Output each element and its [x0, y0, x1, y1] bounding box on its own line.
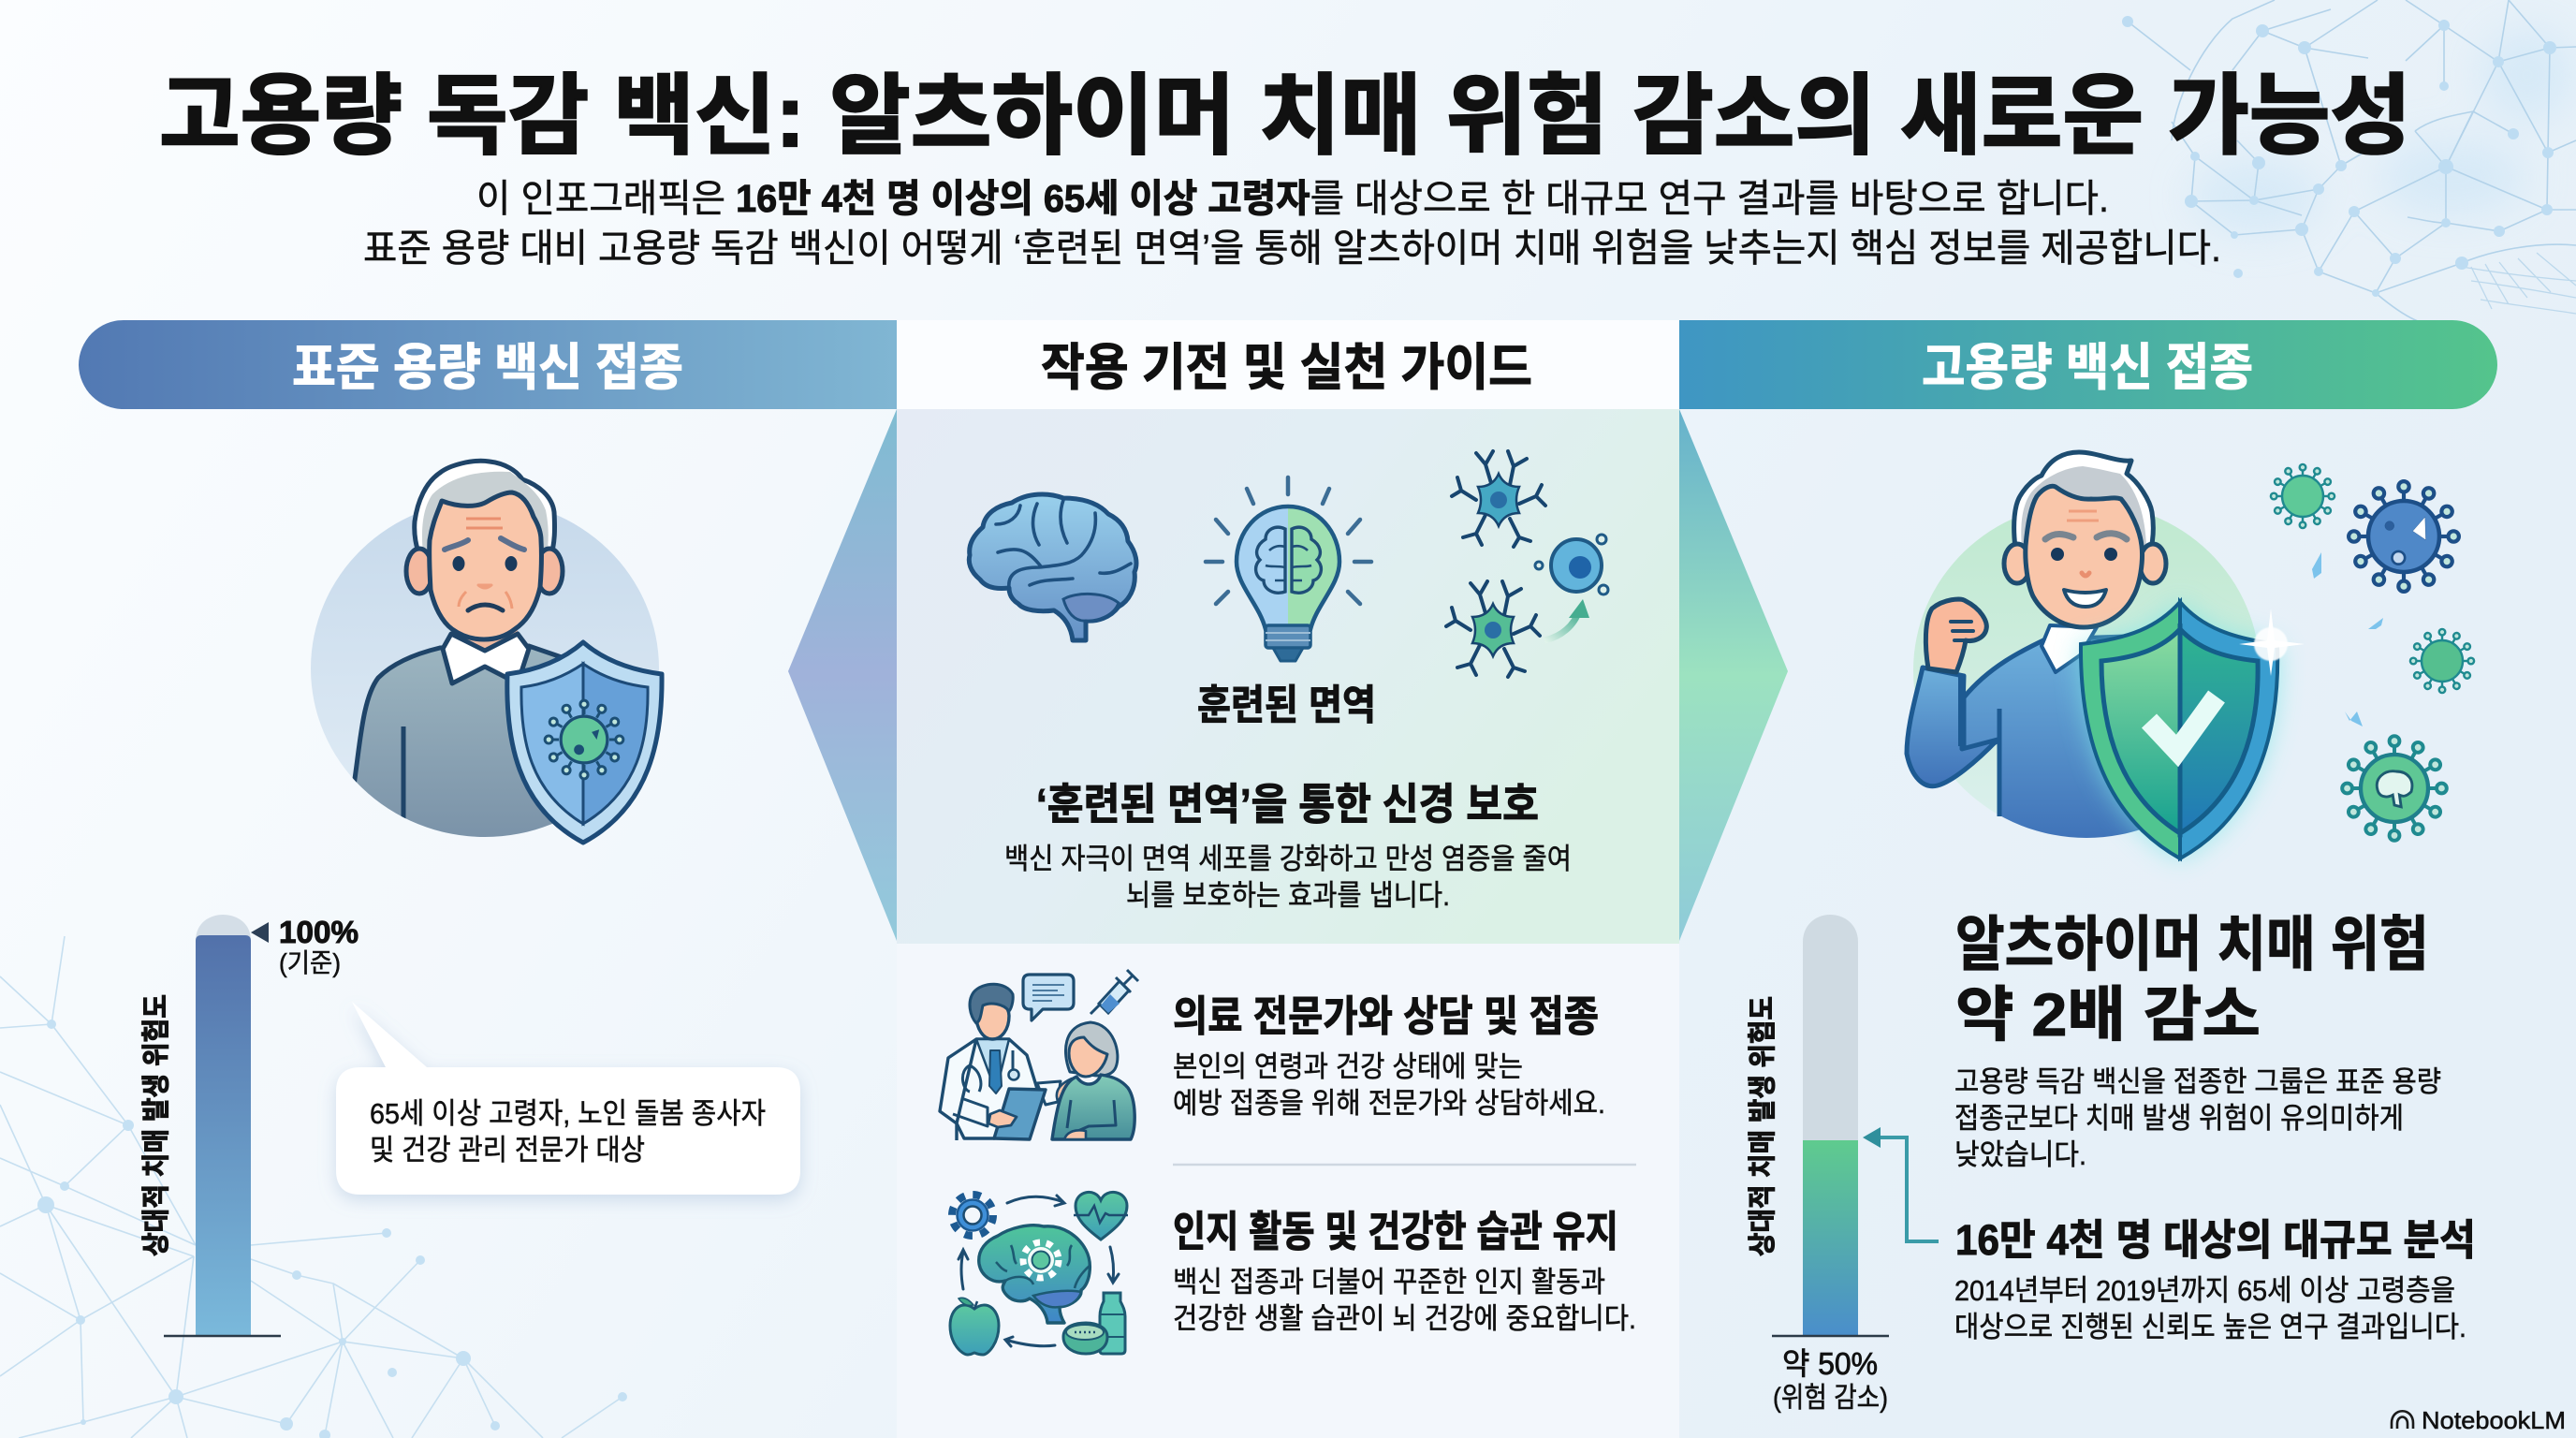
icon: brain: [969, 494, 1136, 640]
icon: virus with brain: [2342, 736, 2447, 841]
value: about 50 percent: 약 50%: [1782, 1346, 1878, 1381]
icon: bowl: [1063, 1323, 1107, 1354]
marker: 100 percent: [251, 922, 269, 943]
icon: brain with gear: [979, 1225, 1090, 1323]
intro text: [363, 177, 2221, 270]
heading: key result: 약 2배 감소: [1955, 981, 2261, 1049]
icon: apple: [950, 1298, 999, 1355]
panel: center guide: [897, 944, 1679, 1438]
heading: neural protection: ‘훈련된 면역’을 통한 신경 보호: [1036, 780, 1539, 829]
heading: study size: 16만 4천 명 대상의 대규모 분석: [1955, 1216, 2476, 1264]
value: 100 percent: 100%: [279, 915, 359, 949]
doctor: [940, 984, 1061, 1140]
header: standard dose: 표준 용량 백신 접종: [292, 340, 683, 396]
axis label: 상대적 치매 발생 위험도: [1748, 996, 1778, 1256]
icon: green virus: [2271, 464, 2334, 528]
text: study description: [1954, 1274, 2466, 1343]
icon: heart: [1074, 1192, 1128, 1240]
title: 고용량 독감 백신: 알츠하이머 치매 위험 감소의 새로운 가능성: [159, 66, 2411, 165]
text: study description: 2014년부터 2019년까지 65세 이상 고령층을: [1954, 1274, 2455, 1307]
header: mechanism and guide: [897, 320, 1679, 409]
text: neural protection description: 백신 자극이 면역 세포를 강화하고 만성 염증을 줄여: [1004, 843, 1572, 875]
icon: glowing shield with check: [2081, 602, 2305, 858]
illustration: brain, bulb and neurons: [969, 451, 1608, 677]
patient: [1052, 1022, 1134, 1139]
panel: center mechanism: [897, 409, 1679, 944]
callout: target group: [336, 1002, 800, 1195]
icon: bottle: [1100, 1293, 1125, 1354]
text: study description: 대상으로 진행된 신뢰도 높은 연구 결과입니다.: [1954, 1311, 2466, 1343]
text: habits description: [1173, 1266, 1636, 1335]
text: key result description: [1954, 1065, 2441, 1171]
text: consult description: 예방 접종을 위해 전문가와 상담하세요.: [1173, 1087, 1605, 1120]
left arrow wing: [788, 409, 897, 941]
text: consult description: [1173, 1050, 1605, 1120]
icon: green virus 2: [2410, 629, 2474, 693]
logo: NotebookLM: NotebookLM: [2422, 1406, 2566, 1434]
header: standard dose: [79, 320, 897, 409]
syringe: [1090, 970, 1138, 1014]
intro text: 표준 용량 대비 고용량 독감 백신이 어떻게 ‘훈련된 면역’을 통해 알츠하이머 치매 위험을 낮추는지 핵심 정보를 제공합니다.: [363, 227, 2221, 270]
arrows: cycle: [959, 1196, 1119, 1346]
header: mechanism and guide: 작용 기전 및 실천 가이드: [1041, 340, 1532, 396]
text: habits description: 건강한 생활 습관이 뇌 건강에 중요합니다.: [1173, 1302, 1636, 1335]
icon: gear: [952, 1195, 993, 1236]
text: neural protection description: 뇌를 보호하는 효과를 냅니다.: [1126, 879, 1450, 912]
icon: doctor consulting patient: [940, 970, 1138, 1140]
text: consult description: 본인의 연령과 건강 상태에 맞는: [1173, 1050, 1523, 1083]
intro text: 이 인포그래픽은 16만 4천 명 이상의 65세 이상 고령자를 대상으로 한 대규모 연구 결과를 바탕으로 합니다.: [476, 177, 2109, 220]
heading: cognition and habits: 인지 활동 및 건강한 습관 유지: [1173, 1208, 1618, 1255]
text: habits description: 백신 접종과 더불어 꾸준한 인지 활동과: [1173, 1266, 1605, 1299]
callout: target group: 및 건강 관리 전문가 대상: [370, 1134, 645, 1167]
bar chart: standard dose: [141, 915, 359, 1336]
axis label: 상대적 치매 발생 위험도: [141, 994, 172, 1256]
text: key result description: 고용량 득감 백신을 접종한 그룹은 표준 용량: [1954, 1065, 2441, 1098]
text: key result description: 낮았습니다.: [1954, 1138, 2086, 1171]
arrow: 50 percent pointer: [1863, 1127, 1939, 1241]
icon: light bulb: [1206, 477, 1371, 661]
label: trained immunity: 훈련된 면역: [1197, 682, 1376, 728]
icon: brain health cycle: [950, 1192, 1128, 1355]
heading: consult and vaccinate: 의료 전문가와 상담 및 접종: [1173, 992, 1599, 1040]
text: key result description: 접종군보다 치매 발생 위험이 유의미하게: [1954, 1102, 2404, 1135]
heading: key result: 알츠하이머 치매 위험: [1955, 911, 2429, 978]
icon: blue virus: [2349, 481, 2459, 592]
icon: shield with virus: [507, 642, 662, 843]
icons: virus fragments: [2312, 552, 2383, 726]
speech bubble: [1023, 975, 1074, 1020]
value note: risk reduction: (위험 감소): [1773, 1383, 1888, 1414]
right arrow wing: [1679, 409, 1788, 941]
callout: target group: 65세 이상 고령자, 노인 돌봄 종사자: [370, 1097, 766, 1130]
illustration: happy senior with strong shield: [1907, 452, 2474, 858]
icon: neurons and immune cell: [1446, 451, 1608, 677]
heading: key result: [1955, 911, 2429, 1049]
illustration: worried senior with basic shield: [311, 461, 662, 843]
text: neural protection description: [1004, 843, 1572, 912]
header: high dose: [1679, 320, 2497, 409]
bar chart: high dose: [1748, 915, 1939, 1414]
header: high dose: 고용량 백신 접종: [1922, 340, 2253, 396]
value note: baseline: (기준): [279, 948, 341, 977]
